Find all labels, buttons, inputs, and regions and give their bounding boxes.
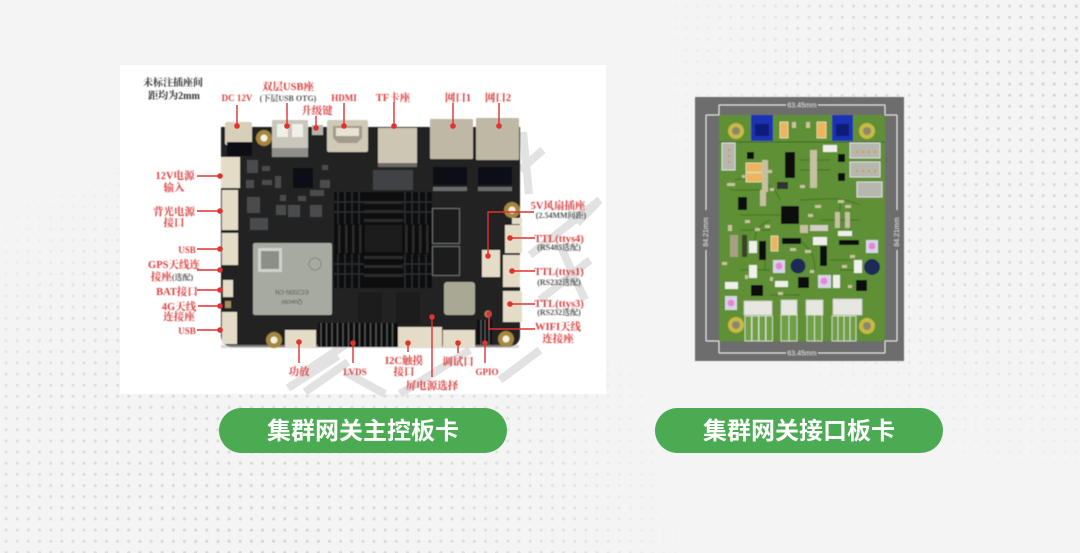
labels: board connectors: 屏电源选择 bbox=[406, 379, 459, 392]
icon: 4G module: Quectel bbox=[282, 298, 302, 304]
icon: electrolytic capacitors bbox=[790, 258, 880, 275]
labels: board connectors: TTL(ttys3) bbox=[534, 299, 584, 310]
icon: mounting holes bbox=[256, 130, 520, 348]
labels: board connectors: 5V风扇插座 bbox=[531, 199, 586, 212]
labels: board connectors: GPIO bbox=[475, 367, 499, 377]
labels: board connectors: 接口 bbox=[394, 365, 414, 378]
labels: board connectors: LVDS bbox=[343, 367, 367, 377]
icon: left connectors bbox=[221, 157, 240, 344]
dimension lines: 84.21mm bbox=[894, 217, 901, 247]
labels: board connectors: 距均为2mm bbox=[148, 89, 200, 102]
icon: 4G module: EC200N-CN bbox=[275, 288, 309, 294]
icon: heatsink bbox=[334, 192, 432, 288]
icon: gold mounting holes bbox=[728, 123, 875, 334]
button: interface board caption: 集群网关接口板卡 bbox=[703, 418, 895, 445]
labels: board connectors: HDMI bbox=[331, 93, 357, 103]
labels: board connectors: 调试口 bbox=[442, 355, 474, 368]
traces bbox=[730, 160, 860, 295]
labels: board connectors: 网口1 bbox=[445, 91, 471, 104]
dimension lines: 63.45mm bbox=[787, 102, 817, 110]
icon: USB port bbox=[272, 120, 308, 157]
dimension lines bbox=[703, 102, 901, 358]
button: interface board caption bbox=[655, 408, 943, 453]
dimension lines: 84.21mm bbox=[703, 217, 710, 247]
icon: orange capacitors bbox=[746, 122, 826, 251]
panel: main control board image bbox=[120, 65, 606, 394]
labels: board connectors: DC 12V bbox=[222, 93, 253, 103]
icon: bottom connectors bbox=[285, 327, 475, 347]
green pcb bbox=[719, 115, 885, 341]
icon: bottom connectors bbox=[744, 299, 862, 315]
icon: DC jack bbox=[225, 122, 252, 156]
labels: board connectors bbox=[143, 76, 587, 392]
icon: board small parts bbox=[246, 160, 330, 230]
icon: bottom pads bbox=[745, 315, 856, 341]
icon: HDMI port bbox=[327, 120, 368, 152]
panel: interface board image bbox=[695, 97, 904, 361]
labels: board connectors: (2.54MM间距) bbox=[536, 210, 587, 220]
labels: board connectors: 背光电源 bbox=[153, 205, 196, 218]
icon: RJ45 ports bbox=[430, 118, 519, 160]
icon: 4G module bbox=[253, 243, 332, 315]
board pcb bbox=[221, 118, 522, 348]
icon: blue connectors bbox=[751, 115, 853, 141]
labels: board connectors: 双层USB座 bbox=[262, 80, 314, 93]
labels: board connectors: 连接座 bbox=[542, 332, 574, 345]
icon: grey connectors bbox=[722, 143, 882, 197]
labels: board connectors: (下层USB OTG) bbox=[260, 93, 317, 103]
labels: board connectors: 4G天线 bbox=[162, 300, 197, 313]
labels: board connectors: 未标注插座间 bbox=[143, 76, 203, 89]
button: main control board caption bbox=[219, 408, 507, 453]
icon: pin headers bbox=[318, 320, 492, 347]
labels: board connectors: 功放 bbox=[288, 365, 310, 378]
dimension lines: 63.45mm bbox=[787, 350, 817, 358]
labels: board connectors: TTL(ttys1) bbox=[534, 267, 584, 278]
labels: board connectors: 升级键 bbox=[301, 104, 333, 117]
callouts: leader lines bbox=[197, 102, 535, 377]
labels: board connectors: (RS485选配) bbox=[537, 242, 581, 252]
labels: board connectors: GPS天线连 bbox=[148, 258, 200, 271]
labels: board connectors: 12V电源 bbox=[155, 169, 196, 182]
watermark bbox=[288, 132, 600, 394]
labels: board connectors: USB bbox=[178, 326, 196, 336]
labels: board connectors: BAT接口 bbox=[156, 285, 198, 298]
icon: WiFi module bbox=[444, 282, 475, 315]
icon: white small connectors bbox=[725, 145, 862, 289]
icon: resistor arrays bbox=[730, 150, 850, 257]
icon: TF card slot bbox=[378, 128, 417, 167]
labels: board connectors: WIFI天线 bbox=[535, 320, 582, 333]
labels: board connectors: USB bbox=[178, 245, 196, 255]
labels: board connectors: 接口 bbox=[164, 216, 184, 229]
icon: right connectors bbox=[482, 225, 522, 322]
labels: board connectors: 网口2 bbox=[485, 91, 511, 104]
labels: board connectors: (RS232选配) bbox=[537, 307, 581, 317]
labels: board connectors: 输入 bbox=[164, 181, 185, 194]
labels: board connectors: (RS232选配) bbox=[537, 277, 581, 287]
icon: upgrade button bbox=[312, 125, 323, 135]
labels: board connectors: 接座(选配) bbox=[151, 270, 193, 283]
small parts bbox=[722, 122, 855, 295]
icon: pink pads bbox=[725, 240, 878, 310]
labels: board connectors: TF卡座 bbox=[376, 91, 411, 104]
labels: board connectors: I2C触摸 bbox=[385, 354, 423, 367]
icon: black ICs bbox=[738, 152, 867, 296]
button: main control board caption: 集群网关主控板卡 bbox=[267, 418, 459, 445]
labels: board connectors: 连接座 bbox=[163, 310, 195, 323]
labels: board connectors: TTL(ttys4) bbox=[534, 234, 584, 245]
